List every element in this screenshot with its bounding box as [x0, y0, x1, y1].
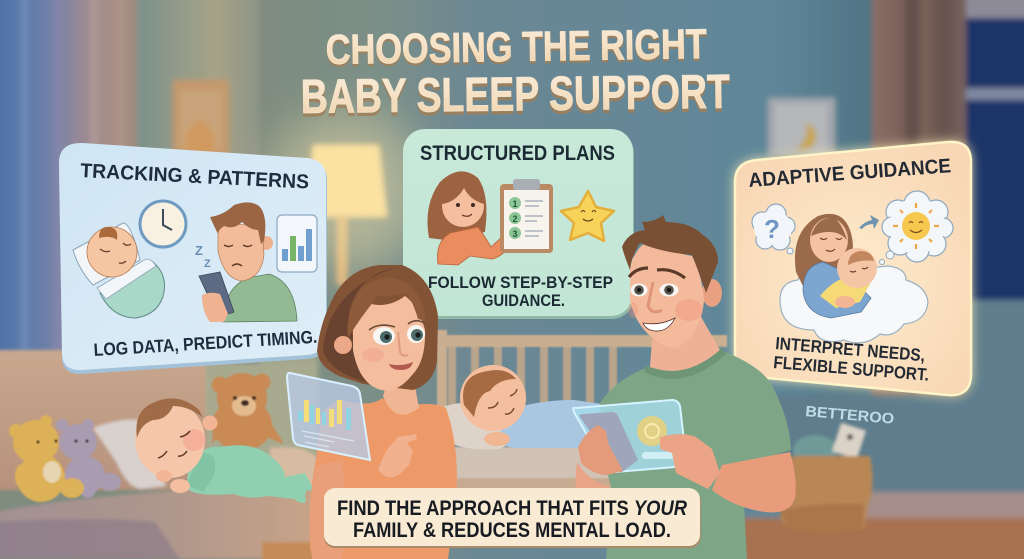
heading: adaptive guidance: ADAPTIVE GUIDANCE	[748, 155, 952, 192]
sofa	[0, 350, 332, 559]
holographic tablet	[573, 400, 687, 472]
icon: clipboard checklist: 3	[512, 229, 518, 239]
icon: mother holding baby on cloud	[780, 214, 928, 343]
icon: swaddled baby	[73, 223, 165, 318]
icon: clipboard checklist	[500, 179, 553, 253]
banner text: FIND THE APPROACH THAT FITS YOUR	[337, 497, 688, 520]
icon: arrow	[859, 215, 879, 229]
icon: zzz: Z	[195, 243, 203, 258]
laundry basket	[780, 423, 873, 533]
title: BABY SLEEP SUPPORT	[300, 66, 730, 124]
icon: clipboard checklist: 2	[512, 214, 518, 224]
caption: interpret needs, flexible support	[773, 333, 930, 385]
crib	[437, 330, 727, 492]
icon: chart bubble	[277, 215, 317, 272]
mother figure	[310, 265, 457, 559]
title: BABY SLEEP SUPPORT	[300, 69, 730, 127]
stuffed toys	[9, 373, 284, 502]
icon: tired father	[199, 202, 297, 322]
title: CHOOSING THE RIGHT	[325, 22, 707, 75]
caption: follow step-by-step guidance: GUIDANCE.	[482, 291, 565, 310]
banner text: FAMILY & REDUCES MENTAL LOAD.	[353, 519, 671, 542]
title	[300, 20, 730, 127]
icon: smiling star	[561, 191, 614, 241]
phone and hands	[576, 412, 720, 500]
caption: interpret needs, flexible support: FLEXIBLE SUPPORT.	[773, 352, 930, 385]
sleeping baby on sofa	[135, 398, 315, 503]
title: CHOOSING THE RIGHT	[325, 20, 707, 73]
banner text	[337, 497, 688, 542]
heading: tracking and patterns: TRACKING & PATTERNS	[80, 160, 310, 194]
caption: follow step-by-step guidance	[428, 273, 613, 310]
holographic chart tablet	[287, 373, 370, 460]
icon: sun thought bubble	[880, 191, 953, 264]
brand: betteroo: BETTEROO	[805, 403, 895, 428]
caption: follow step-by-step guidance: FOLLOW STEP-BY-STEP	[428, 273, 613, 292]
panel: tracking and patterns	[59, 143, 327, 374]
panel: structured plans	[403, 129, 634, 319]
panel: adaptive guidance	[735, 142, 971, 395]
icon: question thought bubble: ?	[764, 214, 780, 244]
icon: clock	[140, 201, 186, 247]
father figure	[598, 215, 796, 559]
bottom banner	[324, 488, 701, 548]
mother's raised hand	[378, 434, 417, 477]
icon: small z: Z	[204, 258, 211, 270]
icon: clipboard checklist: 1	[512, 199, 518, 209]
caption: log data: LOG DATA, PREDICT TIMING.	[93, 327, 318, 360]
heading: structured plans: STRUCTURED PLANS	[420, 142, 615, 165]
sleeping baby in crib	[434, 365, 602, 449]
icon: woman pointing	[427, 171, 510, 265]
caption: interpret needs, flexible support: INTERPRET NEEDS,	[775, 333, 926, 365]
icon: question thought bubble	[752, 204, 795, 254]
